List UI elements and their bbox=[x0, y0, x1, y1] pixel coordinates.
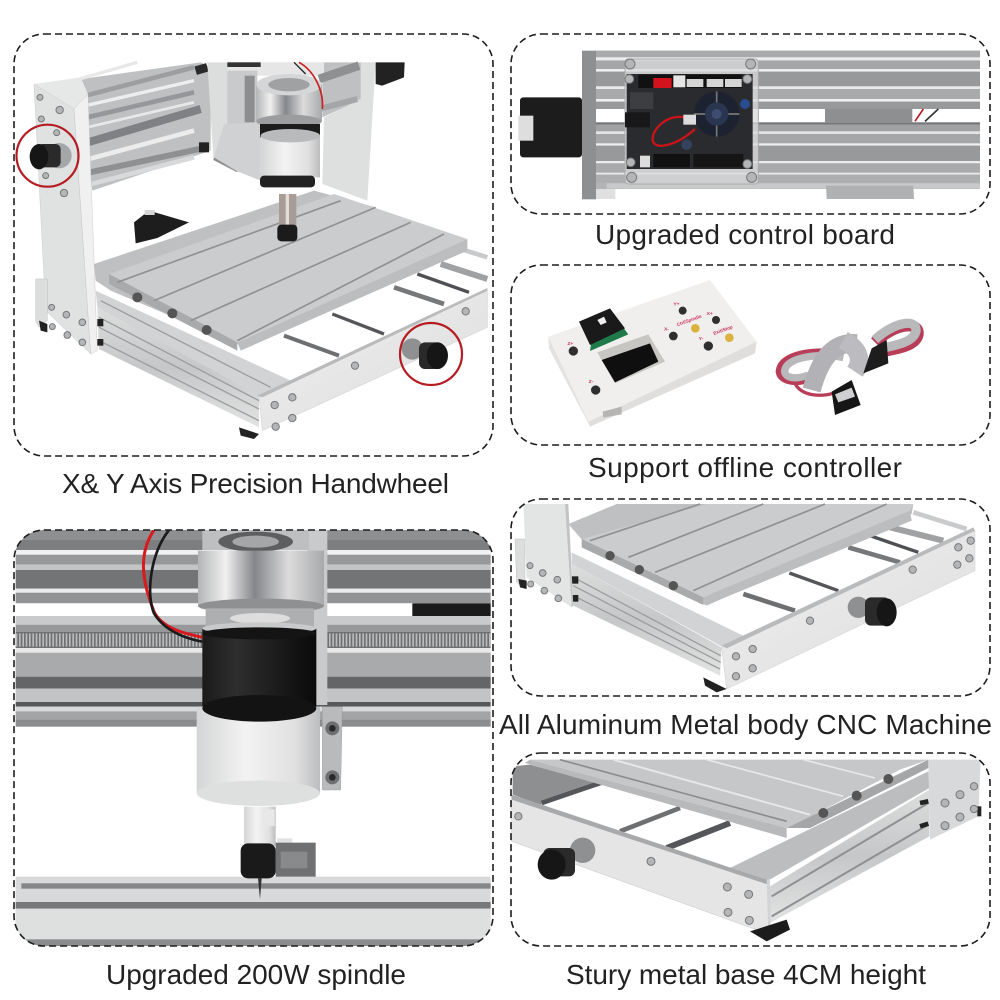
caption: control board: Upgraded control board bbox=[595, 219, 895, 250]
base rails bbox=[542, 783, 730, 848]
shaft and collet bbox=[241, 807, 316, 899]
handwheel bbox=[538, 838, 595, 880]
spindle top housing bbox=[198, 530, 324, 613]
panel: metal base photo bbox=[511, 753, 990, 946]
spindle rear plate bbox=[307, 530, 327, 705]
panel: offline controller photo bbox=[511, 265, 990, 445]
control board bbox=[627, 74, 753, 169]
screen bbox=[597, 334, 665, 383]
front plate bbox=[512, 796, 770, 935]
base rails bbox=[743, 512, 967, 611]
spindle body bbox=[256, 84, 322, 121]
controller box bbox=[548, 280, 757, 427]
long base frame bbox=[730, 771, 929, 881]
acrylic case bbox=[625, 59, 758, 184]
buttons bbox=[569, 346, 578, 356]
ribbon cable bbox=[781, 323, 918, 415]
table bbox=[582, 504, 913, 597]
bracket with bolts bbox=[322, 707, 342, 790]
long base frame bbox=[572, 552, 747, 647]
base rails bbox=[284, 249, 487, 356]
long base frame bbox=[96, 291, 291, 397]
caption: metal base: Stury metal base 4CM height bbox=[566, 959, 926, 990]
controller box: Exit/Stop bbox=[713, 324, 733, 336]
handwheel on upright bbox=[30, 143, 72, 169]
controller box: X+ bbox=[707, 311, 713, 317]
lower silver housing bbox=[197, 707, 320, 793]
controller box: Z+ bbox=[567, 341, 573, 347]
icon: red circle base handwheel bbox=[400, 323, 462, 385]
controller box: Y+ bbox=[673, 302, 680, 308]
gantry plate bbox=[322, 62, 362, 117]
caption: offline controller: Support offline controller bbox=[588, 452, 902, 483]
panel: control board photo bbox=[511, 34, 990, 214]
wires bbox=[143, 530, 202, 637]
controller box: Z- bbox=[589, 379, 594, 385]
panel: spindle close-up photo bbox=[14, 530, 493, 946]
red loop wire bbox=[653, 117, 695, 146]
stepper motor bbox=[134, 211, 189, 243]
icon: cooling fan bbox=[681, 91, 750, 150]
panel: handwheel machine photo bbox=[14, 34, 493, 456]
controller box: Ctrl/Spindle bbox=[676, 313, 703, 327]
rear table carrier bbox=[94, 191, 376, 344]
caption: aluminium body: All Aluminum Metal body CNC Machine bbox=[499, 709, 992, 740]
connector bbox=[590, 323, 628, 351]
tool shaft and collet bbox=[277, 194, 297, 241]
handwheel bbox=[848, 597, 897, 626]
table bbox=[109, 194, 467, 342]
table bbox=[530, 760, 928, 828]
stepper motor bbox=[520, 97, 582, 157]
table extrusion bbox=[16, 877, 491, 946]
upright bbox=[515, 539, 525, 589]
caption: handwheel: X& Y Axis Precision Handwheel bbox=[62, 468, 449, 499]
end plate bbox=[582, 51, 596, 199]
motor body bbox=[202, 628, 316, 715]
spindle mount bbox=[214, 122, 261, 181]
upright bbox=[928, 760, 981, 840]
caption: spindle: Upgraded 200W spindle bbox=[106, 959, 406, 990]
rear rails bbox=[16, 530, 491, 727]
controller box: Y- bbox=[699, 336, 704, 342]
controller box: X- bbox=[664, 327, 669, 333]
handwheel on base bbox=[402, 338, 448, 369]
icon: red circle upright handwheel bbox=[16, 125, 78, 187]
panel: aluminium body photo bbox=[511, 499, 990, 696]
